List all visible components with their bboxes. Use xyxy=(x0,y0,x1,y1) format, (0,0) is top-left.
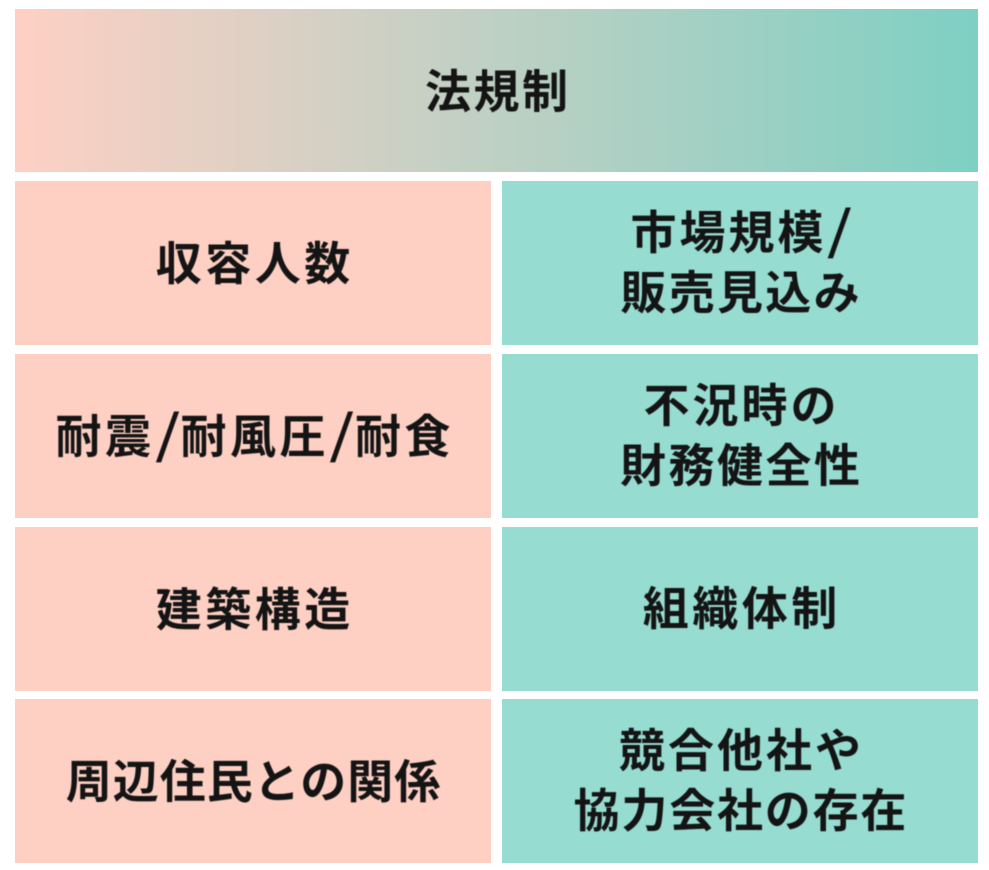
panel: 収容人数: 収容人数 xyxy=(156,238,354,290)
panel: 収容人数 xyxy=(15,181,491,345)
panel: 組織体制: 組織体制 xyxy=(643,583,841,635)
panel: 市場規模/販売見込み xyxy=(502,181,978,345)
panel: 建築構造: 建築構造 xyxy=(156,584,354,636)
panel: header 法規制 xyxy=(15,9,978,172)
panel: 不況時の財務健全性 xyxy=(502,354,978,518)
panel: 市場規模/販売見込み: / xyxy=(827,189,852,264)
panel: 競合他社や協力会社の存在 xyxy=(502,699,978,863)
panel: 市場規模/販売見込み: 市場規模 xyxy=(630,207,826,259)
panel: 周辺住民との関係: 周辺住民との関係 xyxy=(66,756,441,808)
panel: 耐震/耐風圧/耐食: / xyxy=(155,393,180,468)
panel: 耐震/耐風圧/耐食: 耐震 耐風圧 耐食 xyxy=(56,411,454,463)
panel: 市場規模/販売見込み: 販売見込み xyxy=(620,267,862,319)
panel: 不況時の財務健全性: 財務健全性 xyxy=(620,440,862,492)
panel: 競合他社や協力会社の存在: 競合他社や xyxy=(619,725,864,777)
panel: 耐震/耐風圧/耐食 xyxy=(15,354,491,518)
panel: 競合他社や協力会社の存在: 協力会社の存在 xyxy=(574,785,908,837)
panel: 耐震/耐風圧/耐食: / xyxy=(329,393,355,468)
panel: 建築構造 xyxy=(15,527,491,691)
panel: 不況時の財務健全性: 不況時の xyxy=(644,380,840,432)
panel: 組織体制 xyxy=(502,527,978,691)
panel: 周辺住民との関係 xyxy=(15,699,491,863)
panel: header 法規制: 法規制 xyxy=(425,66,570,118)
